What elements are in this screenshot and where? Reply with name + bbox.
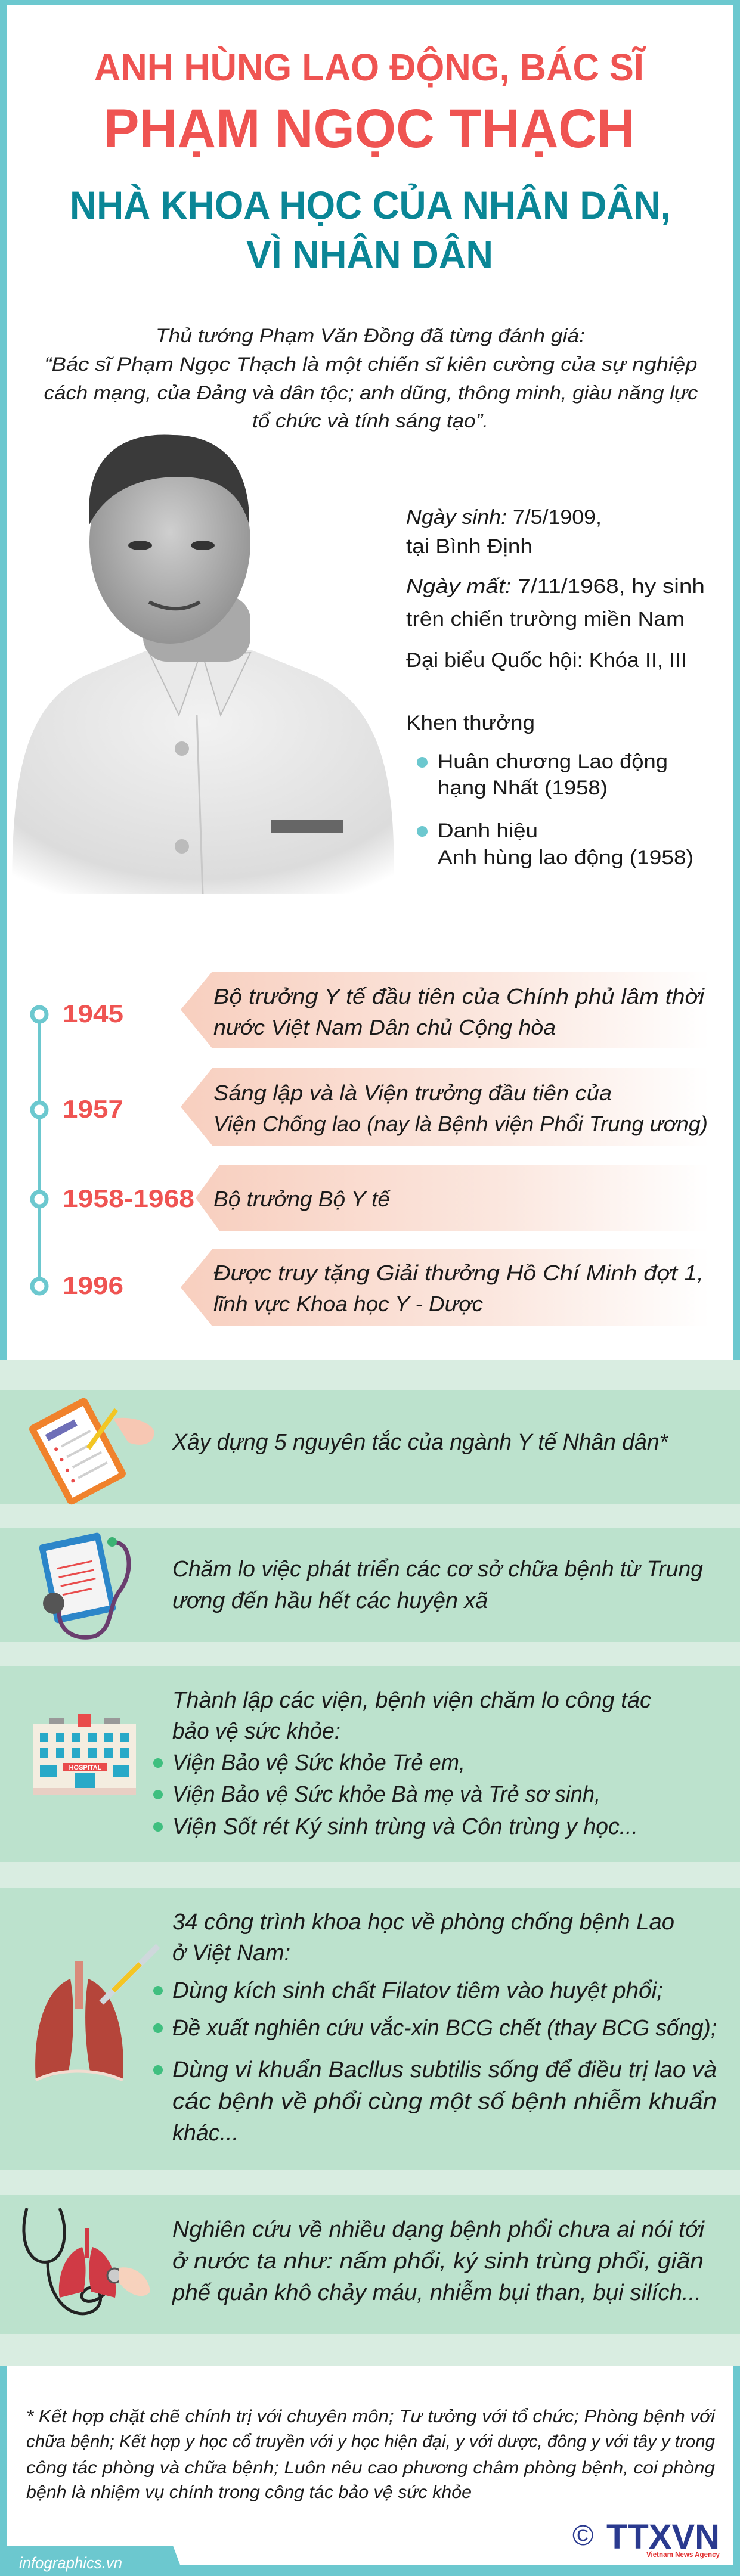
panel 2: facilities: Chăm lo việc phát triển các cơ sở chữa bệnh từ Trung xyxy=(172,1557,703,1582)
quote: “Bác sĩ Phạm Ngọc Thạch là một chiến sĩ kiên cường của sự nghiệp xyxy=(44,353,698,375)
panel 2: facilities xyxy=(0,1528,740,1642)
info: personal details: Đại biểu Quốc hội: Khóa II, III xyxy=(406,649,687,672)
logo: TTXVN: TTXVN xyxy=(606,2518,720,2556)
timeline item 1958-1968: 1958-1968 xyxy=(63,1184,194,1212)
panel 4: tuberculosis research: Dùng kích sinh chất Filatov tiêm vào huyệt phổi; xyxy=(172,1978,663,2003)
panel 3: institutes: Viện Sốt rét Ký sinh trùng và Côn trùng y học... xyxy=(172,1814,638,1839)
timeline item 1996: 1996 xyxy=(63,1271,123,1299)
panel 4: tuberculosis research: các bệnh về phổi cùng một số bệnh nhiễm khuẩn xyxy=(172,2088,717,2114)
footnote: bệnh là nhiệm vụ chính trong công tác bảo vệ sức khỏe xyxy=(26,2482,472,2502)
panel 3: institutes: Viện Bảo vệ Sức khỏe Trẻ em, xyxy=(172,1751,465,1776)
panel 4: tuberculosis research xyxy=(0,1888,740,2170)
info: personal details: Danh hiệu xyxy=(438,820,538,842)
icon: hospital: HOSPITAL xyxy=(69,1764,102,1771)
timeline item 1957: Viện Chống lao (nay là Bệnh viện Phổi Trung ương) xyxy=(213,1112,708,1136)
panel 4: tuberculosis research: ở Việt Nam: xyxy=(172,1941,290,1966)
panel 3: institutes: Viện Bảo vệ Sức khỏe Bà mẹ và Trẻ sơ sinh, xyxy=(172,1782,600,1807)
info: personal details: trên chiến trường miền Nam xyxy=(406,608,685,631)
info: personal details xyxy=(406,506,705,869)
title: ANH HÙNG LAO ĐỘNG, BÁC SĨ xyxy=(94,45,646,89)
title xyxy=(70,45,671,277)
quote: tổ chức và tính sáng tạo”. xyxy=(252,410,488,432)
timeline item 1945: nước Việt Nam Dân chủ Cộng hòa xyxy=(213,1015,556,1039)
timeline item 1957: Sáng lập và là Viện trưởng đầu tiên của xyxy=(213,1081,612,1105)
footer tab: infographics.vn: infographics.vn xyxy=(19,2554,122,2572)
quote: cách mạng, của Đảng và dân tộc; anh dũng, thông minh, giàu năng lực xyxy=(44,382,698,404)
timeline xyxy=(32,972,710,1326)
panel 3: institutes: bảo vệ sức khỏe: xyxy=(172,1719,340,1744)
footer tab: infographics.vn xyxy=(0,2546,184,2576)
panel 4: tuberculosis research: Đề xuất nghiên cứu vắc-xin BCG chết (thay BCG sống); xyxy=(172,2015,717,2041)
info: personal details: Anh hùng lao động (1958) xyxy=(438,846,693,869)
icon: stethoscope on lungs xyxy=(24,2208,150,2314)
footnote: công tác phòng và chữa bệnh; Luôn nêu cao phương châm phòng bệnh, coi phòng xyxy=(26,2458,715,2478)
panel 5: lung diseases: phế quản khô chảy máu, nhiễm bụi than, bụi silích... xyxy=(172,2279,701,2305)
footnote xyxy=(26,2407,716,2502)
title: VÌ NHÂN DÂN xyxy=(246,232,493,277)
title: NHÀ KHOA HỌC CỦA NHÂN DÂN, xyxy=(70,183,671,227)
portrait photo xyxy=(12,435,394,894)
info: personal details: hạng Nhất (1958) xyxy=(438,777,608,799)
timeline item 1945: 1945 xyxy=(63,1000,123,1028)
timeline item 1996: Được truy tặng Giải thưởng Hồ Chí Minh đợt 1, xyxy=(213,1261,704,1285)
info: personal details: Ngày sinh: 7/5/1909, xyxy=(406,506,602,529)
icon: clipboard and stethoscope xyxy=(39,1532,129,1637)
panel 2: facilities: ương đến hầu hết các huyện xã xyxy=(172,1588,488,1613)
panel 5: lung diseases xyxy=(0,2195,740,2334)
info: personal details: Huân chương Lao động xyxy=(438,750,668,773)
info: personal details: tại Bình Định xyxy=(406,535,532,558)
timeline item 1958-1968: Bộ trưởng Bộ Y tế xyxy=(213,1187,392,1211)
info: personal details: Ngày mất: 7/11/1968, hy sinh xyxy=(406,575,705,598)
timeline item 1996: lĩnh vực Khoa học Y - Dược xyxy=(213,1292,483,1316)
panel 5: lung diseases: Nghiên cứu về nhiều dạng bệnh phổi chưa ai nói tới xyxy=(172,2217,705,2242)
panel 1: 5 principles xyxy=(0,1390,740,1506)
logo: TTXVN: © xyxy=(572,2520,593,2552)
panel 1: 5 principles: Xây dựng 5 nguyên tắc của ngành Y tế Nhân dân* xyxy=(172,1429,668,1455)
info: personal details: Khen thưởng xyxy=(406,712,535,734)
icon: lungs and syringe xyxy=(35,1946,158,2080)
panel 4: tuberculosis research: 34 công trình khoa học về phòng chống bệnh Lao xyxy=(172,1910,674,1935)
panel 3: institutes: Thành lập các viện, bệnh viện chăm lo công tác xyxy=(172,1688,651,1713)
timeline item 1945: Bộ trưởng Y tế đầu tiên của Chính phủ lâm thời xyxy=(213,984,705,1008)
title: PHẠM NGỌC THẠCH xyxy=(104,98,635,159)
icon: hospital xyxy=(33,1714,136,1795)
timeline item 1958-1968 xyxy=(32,1165,710,1231)
panel 3: institutes xyxy=(0,1666,740,1862)
panel 4: tuberculosis research: khác... xyxy=(172,2121,239,2146)
timeline item 1957: 1957 xyxy=(63,1095,123,1123)
timeline item 1945 xyxy=(32,972,710,1048)
timeline item 1996 xyxy=(32,1249,710,1326)
icon: clipboard with pen xyxy=(27,1396,154,1506)
footnote: chữa bệnh; Kết hợp y học cổ truyền với y học hiện đại, y với dược, đông y với tây y trong xyxy=(26,2432,715,2451)
logo: TTXVN: Vietnam News Agency xyxy=(646,2550,720,2559)
timeline item 1957 xyxy=(32,1068,710,1146)
footnote: * Kết hợp chặt chẽ chính trị với chuyên môn; Tư tưởng với tổ chức; Phòng bệnh với xyxy=(26,2407,716,2426)
quote xyxy=(44,325,698,432)
panel 5: lung diseases: ở nước ta như: nấm phổi, ký sinh trùng phổi, giãn xyxy=(172,2249,704,2274)
panel 4: tuberculosis research: Dùng vi khuẩn Bacllus subtilis sống để điều trị lao và xyxy=(172,2057,717,2082)
quote: Thủ tướng Phạm Văn Đồng đã từng đánh giá: xyxy=(156,325,585,346)
